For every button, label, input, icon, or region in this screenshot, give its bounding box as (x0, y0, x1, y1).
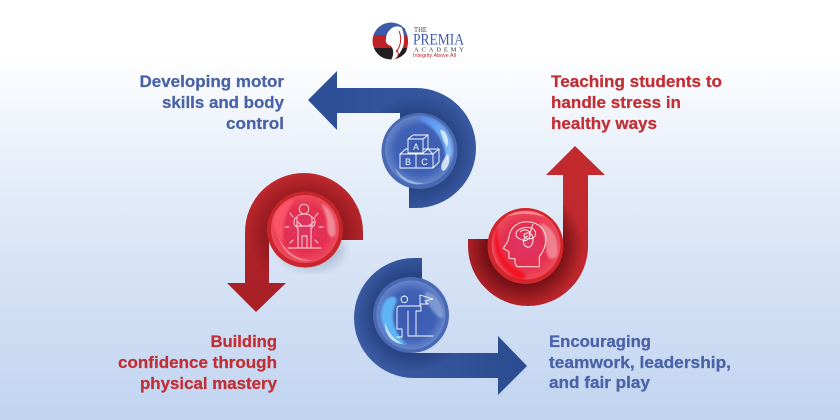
step: teamwork (354, 258, 731, 395)
icon: head with tangled thoughts (503, 222, 546, 267)
label: teamwork: and fair play (549, 374, 651, 392)
label: confidence (118, 333, 278, 393)
icon: person holding flag (397, 295, 433, 337)
label: stress handling: handle stress in (551, 94, 681, 112)
icon: confident person (285, 204, 323, 248)
label: confidence: confidence through (118, 354, 277, 372)
logo (372, 22, 465, 60)
label: teamwork: teamwork, leadership, (549, 354, 731, 372)
logo wordmark: ACADEMY (414, 46, 464, 54)
logo wordmark: PREMIA (413, 32, 465, 48)
icon: ABC blocks: A (413, 142, 419, 152)
red arrow pointing up (468, 146, 605, 306)
glass ball: head icon (488, 208, 564, 284)
glass ball: leader with flag icon (373, 277, 449, 353)
logo wordmark: Integrity Above All (413, 53, 456, 59)
icon: ABC blocks: B (405, 157, 411, 167)
step: stress handling (468, 73, 722, 306)
label: motor skills: control (226, 115, 284, 133)
soft shadow under ball (280, 230, 344, 270)
label: confidence: physical mastery (140, 375, 278, 393)
blue arrow pointing right (354, 258, 527, 395)
label: motor skills: Developing motor (140, 73, 285, 91)
icon: ABC blocks (400, 135, 439, 168)
label: teamwork (549, 333, 731, 392)
red arrow pointing down (227, 173, 363, 312)
label: stress handling (551, 73, 722, 133)
icon: ABC blocks: C (421, 157, 428, 167)
glass ball: person icon (267, 192, 343, 268)
logo emblem (372, 22, 410, 60)
label: motor skills: skills and body (162, 94, 285, 112)
label: stress handling: healthy ways (551, 115, 657, 133)
step: confidence (118, 173, 363, 393)
label: confidence: Building (210, 333, 277, 351)
label: teamwork: Encouraging (549, 333, 651, 351)
blue arrow pointing left (308, 71, 476, 208)
label: motor skills (140, 73, 285, 133)
label: stress handling: Teaching students to (551, 73, 722, 91)
logo wordmark: THE (414, 26, 427, 34)
step: motor skills (140, 71, 476, 208)
glass ball: blocks icon (382, 113, 458, 189)
logo wordmark (413, 26, 465, 59)
